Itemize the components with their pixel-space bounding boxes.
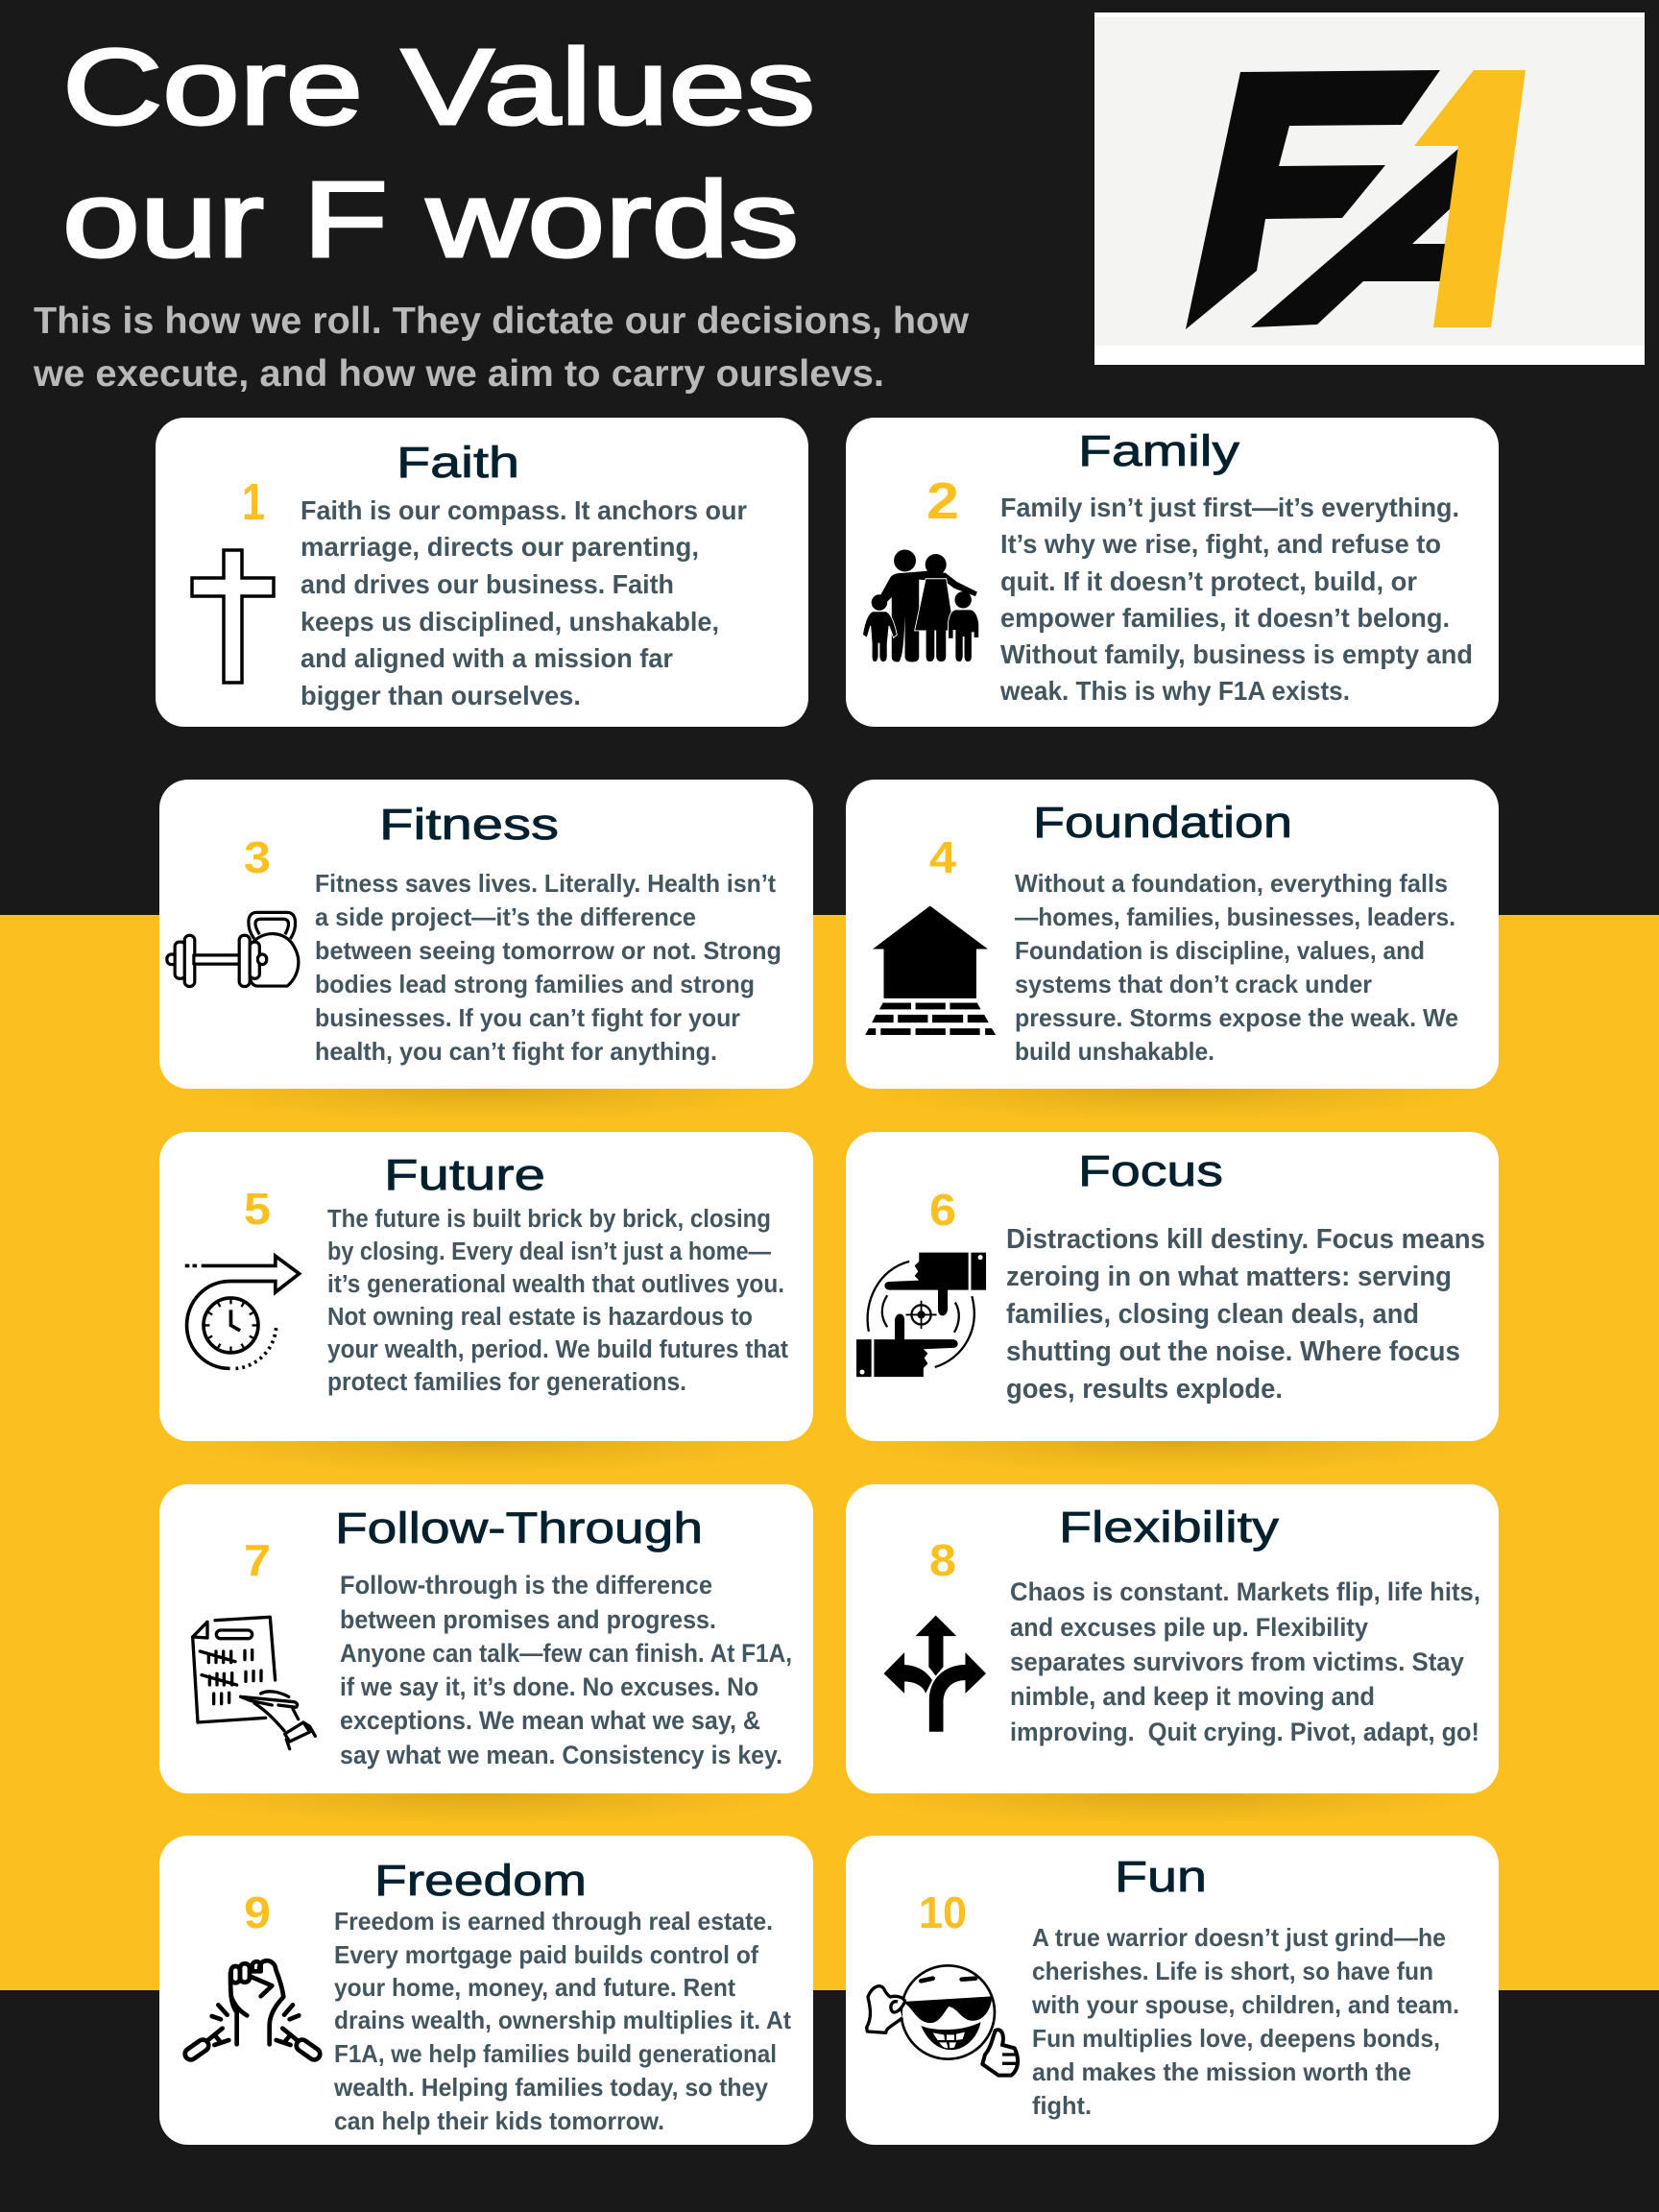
subtitle: This is how we roll. They dictate our decisions, how — [34, 301, 970, 342]
text: Freedom body: Every mortgage paid builds control of — [334, 1940, 758, 1969]
text: Future body — [327, 1206, 788, 1396]
text: Faith body — [301, 495, 747, 710]
text: Freedom body — [333, 1907, 791, 2135]
text: Flexibility body: separates survivors from victims. Stay — [1010, 1647, 1464, 1676]
text: Fun body: and makes the mission worth the — [1032, 2057, 1411, 2086]
text: Follow-Through body: Anyone can talk—few can finish. At F1A, — [340, 1639, 792, 1668]
text: Follow-Through body: exceptions. We mean what we say, & — [340, 1706, 760, 1735]
heading: Fitness: Fitness — [379, 800, 559, 849]
text: Focus body: Distractions kill destiny. Focus means — [1006, 1224, 1485, 1255]
panel: Foundation — [846, 780, 1499, 1089]
card shadows — [169, 1056, 1489, 1826]
number 5: 5 — [244, 1184, 271, 1234]
text: Fun body — [1031, 1923, 1459, 2120]
text: Follow-Through body — [340, 1571, 792, 1769]
text: Foundation body: Foundation is discipline, values, and — [1015, 936, 1425, 965]
text: Family body: It’s why we rise, fight, and refuse to — [1000, 529, 1441, 559]
text: Foundation body — [1015, 869, 1458, 1066]
text: Fitness body: businesses. If you can’t fight for your — [315, 1003, 740, 1032]
text: Faith body: keeps us disciplined, unshakable, — [301, 607, 719, 637]
text: Focus body: shutting out the noise. Where focus — [1006, 1336, 1460, 1367]
logo: F1A — [1094, 12, 1645, 365]
icon: smiley with sunglasses — [867, 1965, 1018, 2076]
text: Fitness body: health, you can’t fight for anything. — [315, 1037, 717, 1066]
text: Foundation body: pressure. Storms expose the weak. We — [1015, 1003, 1458, 1032]
text: Flexibility body: and excuses pile up. Flexibility — [1010, 1613, 1368, 1642]
text: Foundation body: —homes, families, businesses, leaders. — [1015, 902, 1455, 931]
heading: Flexibility: Flexibility — [1059, 1503, 1280, 1551]
text: Fun body: fight. — [1032, 2091, 1092, 2120]
heading: Faith: Faith — [397, 438, 519, 487]
text: Follow-Through body: between promises and progress. — [340, 1605, 716, 1634]
icon: house on foundation — [865, 905, 996, 1035]
icon: three way arrows — [884, 1616, 986, 1732]
title — [62, 27, 815, 279]
number 3: 3 — [244, 832, 271, 882]
icon: cross — [192, 550, 274, 683]
text: Future body: by closing. Every deal isn’t just a home— — [327, 1238, 771, 1265]
text: Foundation body: systems that don’t crack under — [1015, 970, 1372, 998]
heading: Follow-Through: Follow-Through — [335, 1503, 703, 1552]
title: our F words — [62, 159, 799, 279]
text: Focus body: zeroing in on what matters: serving — [1006, 1262, 1452, 1292]
text: Foundation body: Without a foundation, everything falls — [1015, 869, 1448, 898]
text: Follow-Through body: if we say it, it’s done. No excuses. No — [340, 1672, 758, 1701]
text: Fun body: A true warrior doesn’t just grind—he — [1032, 1923, 1446, 1952]
text: Future body: Not owning real estate is hazardous to — [327, 1304, 753, 1331]
text: Faith body: and aligned with a mission far — [301, 643, 673, 673]
text: Faith body: marriage, directs our parenting, — [301, 532, 699, 562]
text: Freedom body: your home, money, and future. Rent — [334, 1973, 735, 2002]
text: Fitness body: a side project—it’s the difference — [315, 902, 696, 931]
subtitle: we execute, and how we aim to carry ourslevs. — [33, 353, 884, 395]
text: Family body: Without family, business is empty and — [1000, 639, 1473, 669]
subtitle — [33, 301, 970, 395]
panel: Faith — [156, 418, 808, 727]
number 9: 9 — [244, 1887, 271, 1937]
text: Fun body: Fun multiplies love, deepens bonds, — [1032, 2024, 1440, 2053]
text: Freedom body: F1A, we help families build generational — [334, 2039, 777, 2068]
text: Future body: protect families for generations. — [327, 1369, 686, 1396]
text: Future body: your wealth, period. We build futures that — [327, 1336, 788, 1363]
text: Faith body: and drives our business. Faith — [301, 569, 674, 599]
heading: Freedom: Freedom — [374, 1856, 587, 1905]
panel: Future — [159, 1132, 813, 1441]
text: Fitness body: bodies lead strong families and strong — [315, 970, 755, 998]
panel: Freedom — [159, 1836, 813, 2145]
text: Follow-Through body: say what we mean. Consistency is key. — [340, 1741, 782, 1769]
icon: clock and arrow — [185, 1256, 300, 1368]
panel: Flexibility — [846, 1484, 1499, 1793]
text: Flexibility body: improving. Quit crying. Pivot, adapt, go! — [1010, 1718, 1479, 1746]
icon: tally sheet with hand — [193, 1617, 315, 1749]
text: Foundation body: build unshakable. — [1015, 1037, 1214, 1066]
heading: Foundation: Foundation — [1033, 798, 1292, 847]
icon: fist breaking chains — [182, 1960, 323, 2062]
text: Fun body: cherishes. Life is short, so have fun — [1032, 1957, 1433, 1985]
text: Freedom body: drains wealth, ownership multiplies it. At — [334, 2006, 791, 2034]
number 8: 8 — [929, 1535, 956, 1585]
text: Freedom body: can help their kids tomorrow. — [334, 2106, 664, 2135]
panel: Family — [846, 418, 1499, 727]
heading: Fun: Fun — [1115, 1852, 1207, 1901]
number 2: 2 — [926, 472, 959, 530]
text: Focus body: goes, results explode. — [1006, 1374, 1283, 1405]
panel: Focus — [846, 1132, 1499, 1441]
number 1: 1 — [242, 473, 265, 531]
heading: Focus: Focus — [1078, 1146, 1223, 1195]
icon: dumbbell and kettlebell — [167, 912, 299, 987]
panel: Fun — [846, 1836, 1499, 2145]
panel: Follow-Through — [159, 1484, 813, 1793]
text: Family body: empower families, it doesn’t belong. — [1000, 603, 1450, 633]
icon: hands framing target — [856, 1253, 986, 1377]
number 7: 7 — [244, 1535, 271, 1585]
title: Core Values — [62, 27, 815, 147]
text: Flexibility body — [1010, 1577, 1480, 1746]
text: Focus body: families, closing clean deals, and — [1006, 1299, 1419, 1330]
text: Faith body: Faith is our compass. It anchors our — [301, 495, 747, 525]
text: Family body: weak. This is why F1A exists. — [999, 676, 1350, 706]
text: Focus body — [1006, 1224, 1485, 1405]
text: Family body: quit. If it doesn’t protect, build, or — [1000, 566, 1417, 596]
text: Future body: The future is built brick by brick, closing — [327, 1206, 771, 1233]
text: Fitness body: between seeing tomorrow or not. Strong — [315, 936, 781, 965]
heading: Future: Future — [384, 1150, 545, 1199]
text: Freedom body: Freedom is earned through real estate. — [334, 1907, 773, 1936]
text: Follow-Through body: Follow-through is the difference — [340, 1571, 712, 1599]
text: Flexibility body: nimble, and keep it moving and — [1010, 1682, 1375, 1711]
number 10: 10 — [919, 1887, 967, 1937]
number 6: 6 — [929, 1185, 956, 1235]
number 4: 4 — [929, 832, 956, 882]
text: Freedom body: wealth. Helping families today, so they — [333, 2073, 769, 2102]
text: Future body: it’s generational wealth that outlives you. — [327, 1271, 784, 1298]
text: Faith body: bigger than ourselves. — [301, 681, 581, 710]
panel: Fitness — [159, 780, 813, 1089]
text: Family body: Family isn’t just first—it’s everything. — [1000, 493, 1459, 522]
text: Fitness body: Fitness saves lives. Literally. Health isn’t — [315, 869, 776, 898]
heading: Family: Family — [1078, 426, 1240, 475]
text: Fun body: with your spouse, children, and team. — [1031, 1990, 1459, 2019]
text: Flexibility body: Chaos is constant. Markets flip, life hits, — [1010, 1577, 1480, 1606]
text: Fitness body — [315, 869, 781, 1066]
text: Family body — [999, 493, 1473, 706]
icon: family — [862, 549, 979, 662]
